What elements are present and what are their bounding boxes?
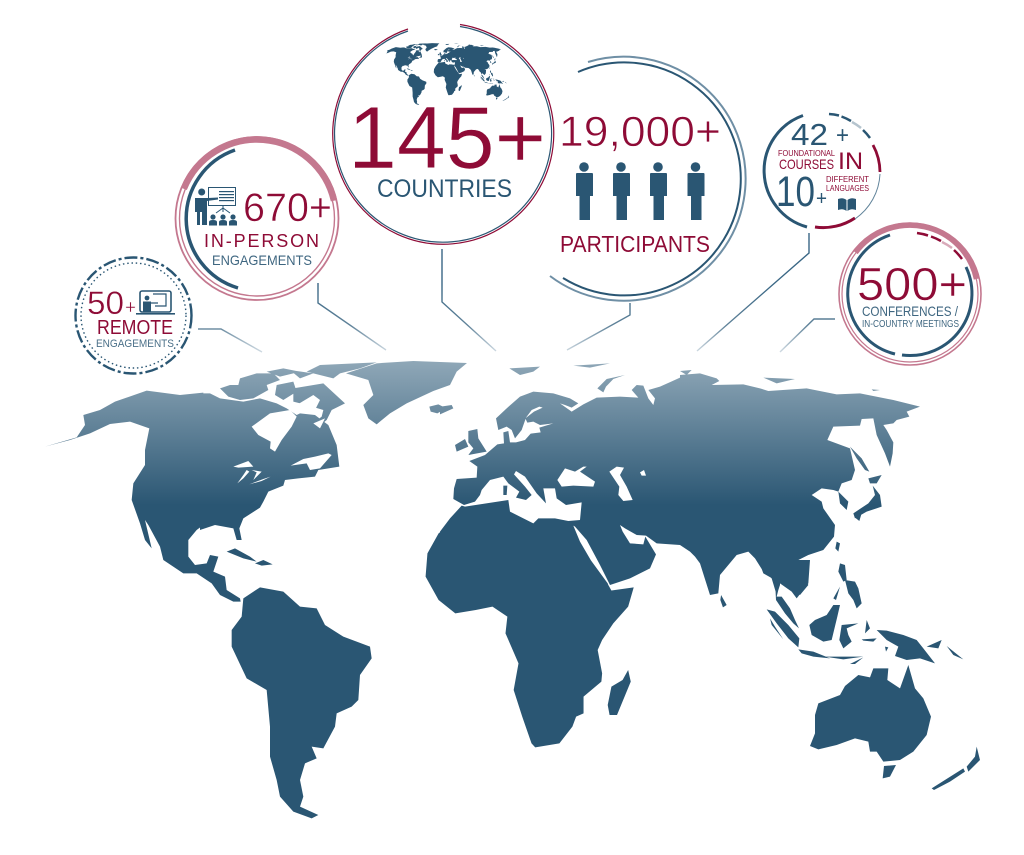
panel: remote engagements [76,258,192,374]
icon: small world map [380,42,512,106]
ring: pink double circle with dark arcs [839,223,981,365]
leader line: in-person engagements [318,283,386,350]
label: engagements: ENGAGEMENTS [96,338,174,350]
leader line: courses [697,233,809,351]
label: foundational courses [778,148,835,172]
icon: book [838,198,856,211]
icon: four people [576,162,704,220]
label: foundational courses: FOUNDATIONAL [778,148,835,158]
stat: 145+: 145+ [348,88,546,187]
stat: 42+ [791,117,849,152]
stat: 670+: 670+ [243,186,332,230]
panel: foundational courses [764,114,880,228]
stat: 500+: 500+ [857,258,967,310]
label: conferences: CONFERENCES / [862,303,958,319]
leader line: participants [567,303,630,350]
ring: red and blue circle with top gap [333,24,554,244]
stat: 50+: 50 [87,285,124,321]
panel: participants [550,57,746,301]
leader line: conferences [780,319,835,352]
label: countries: COUNTRIES [377,175,512,203]
label: participants: PARTICIPANTS [560,231,710,257]
ring: pink double circle with dark arc [176,137,338,300]
icon: laptop with presenter [136,291,175,315]
panel: countries [333,24,554,244]
label: foundational courses: COURSES [779,156,834,172]
ring: segmented circle [764,114,880,228]
label: engagements: ENGAGEMENTS [212,252,312,268]
label: in: IN [838,148,863,175]
stat: 19,000+: 19,000+ [559,108,721,156]
stat: 10+: 10 [776,168,815,216]
panel: conferences [839,223,981,365]
stat: 42+: + [836,122,849,149]
leader line: countries [442,249,496,351]
leader line: remote engagements [198,329,262,352]
label: in-country meetings: IN-COUNTRY MEETINGS [862,318,959,330]
stat: 42+: 42 [791,117,828,152]
label: different languages [826,174,869,193]
ring: dashed and dotted circle [76,258,192,374]
icon: presenter and audience [195,188,237,226]
label: in-person: IN-PERSON [204,231,319,251]
stat: 50+: + [125,297,136,319]
panel: in-person engagements [176,137,338,300]
stat: 10+: + [816,188,827,210]
label: different languages: DIFFERENT [826,174,869,184]
ring: double open arcs [550,57,746,301]
label: different languages: LANGUAGES [826,183,869,193]
world map [30,355,1000,830]
label: remote: REMOTE [97,317,173,339]
